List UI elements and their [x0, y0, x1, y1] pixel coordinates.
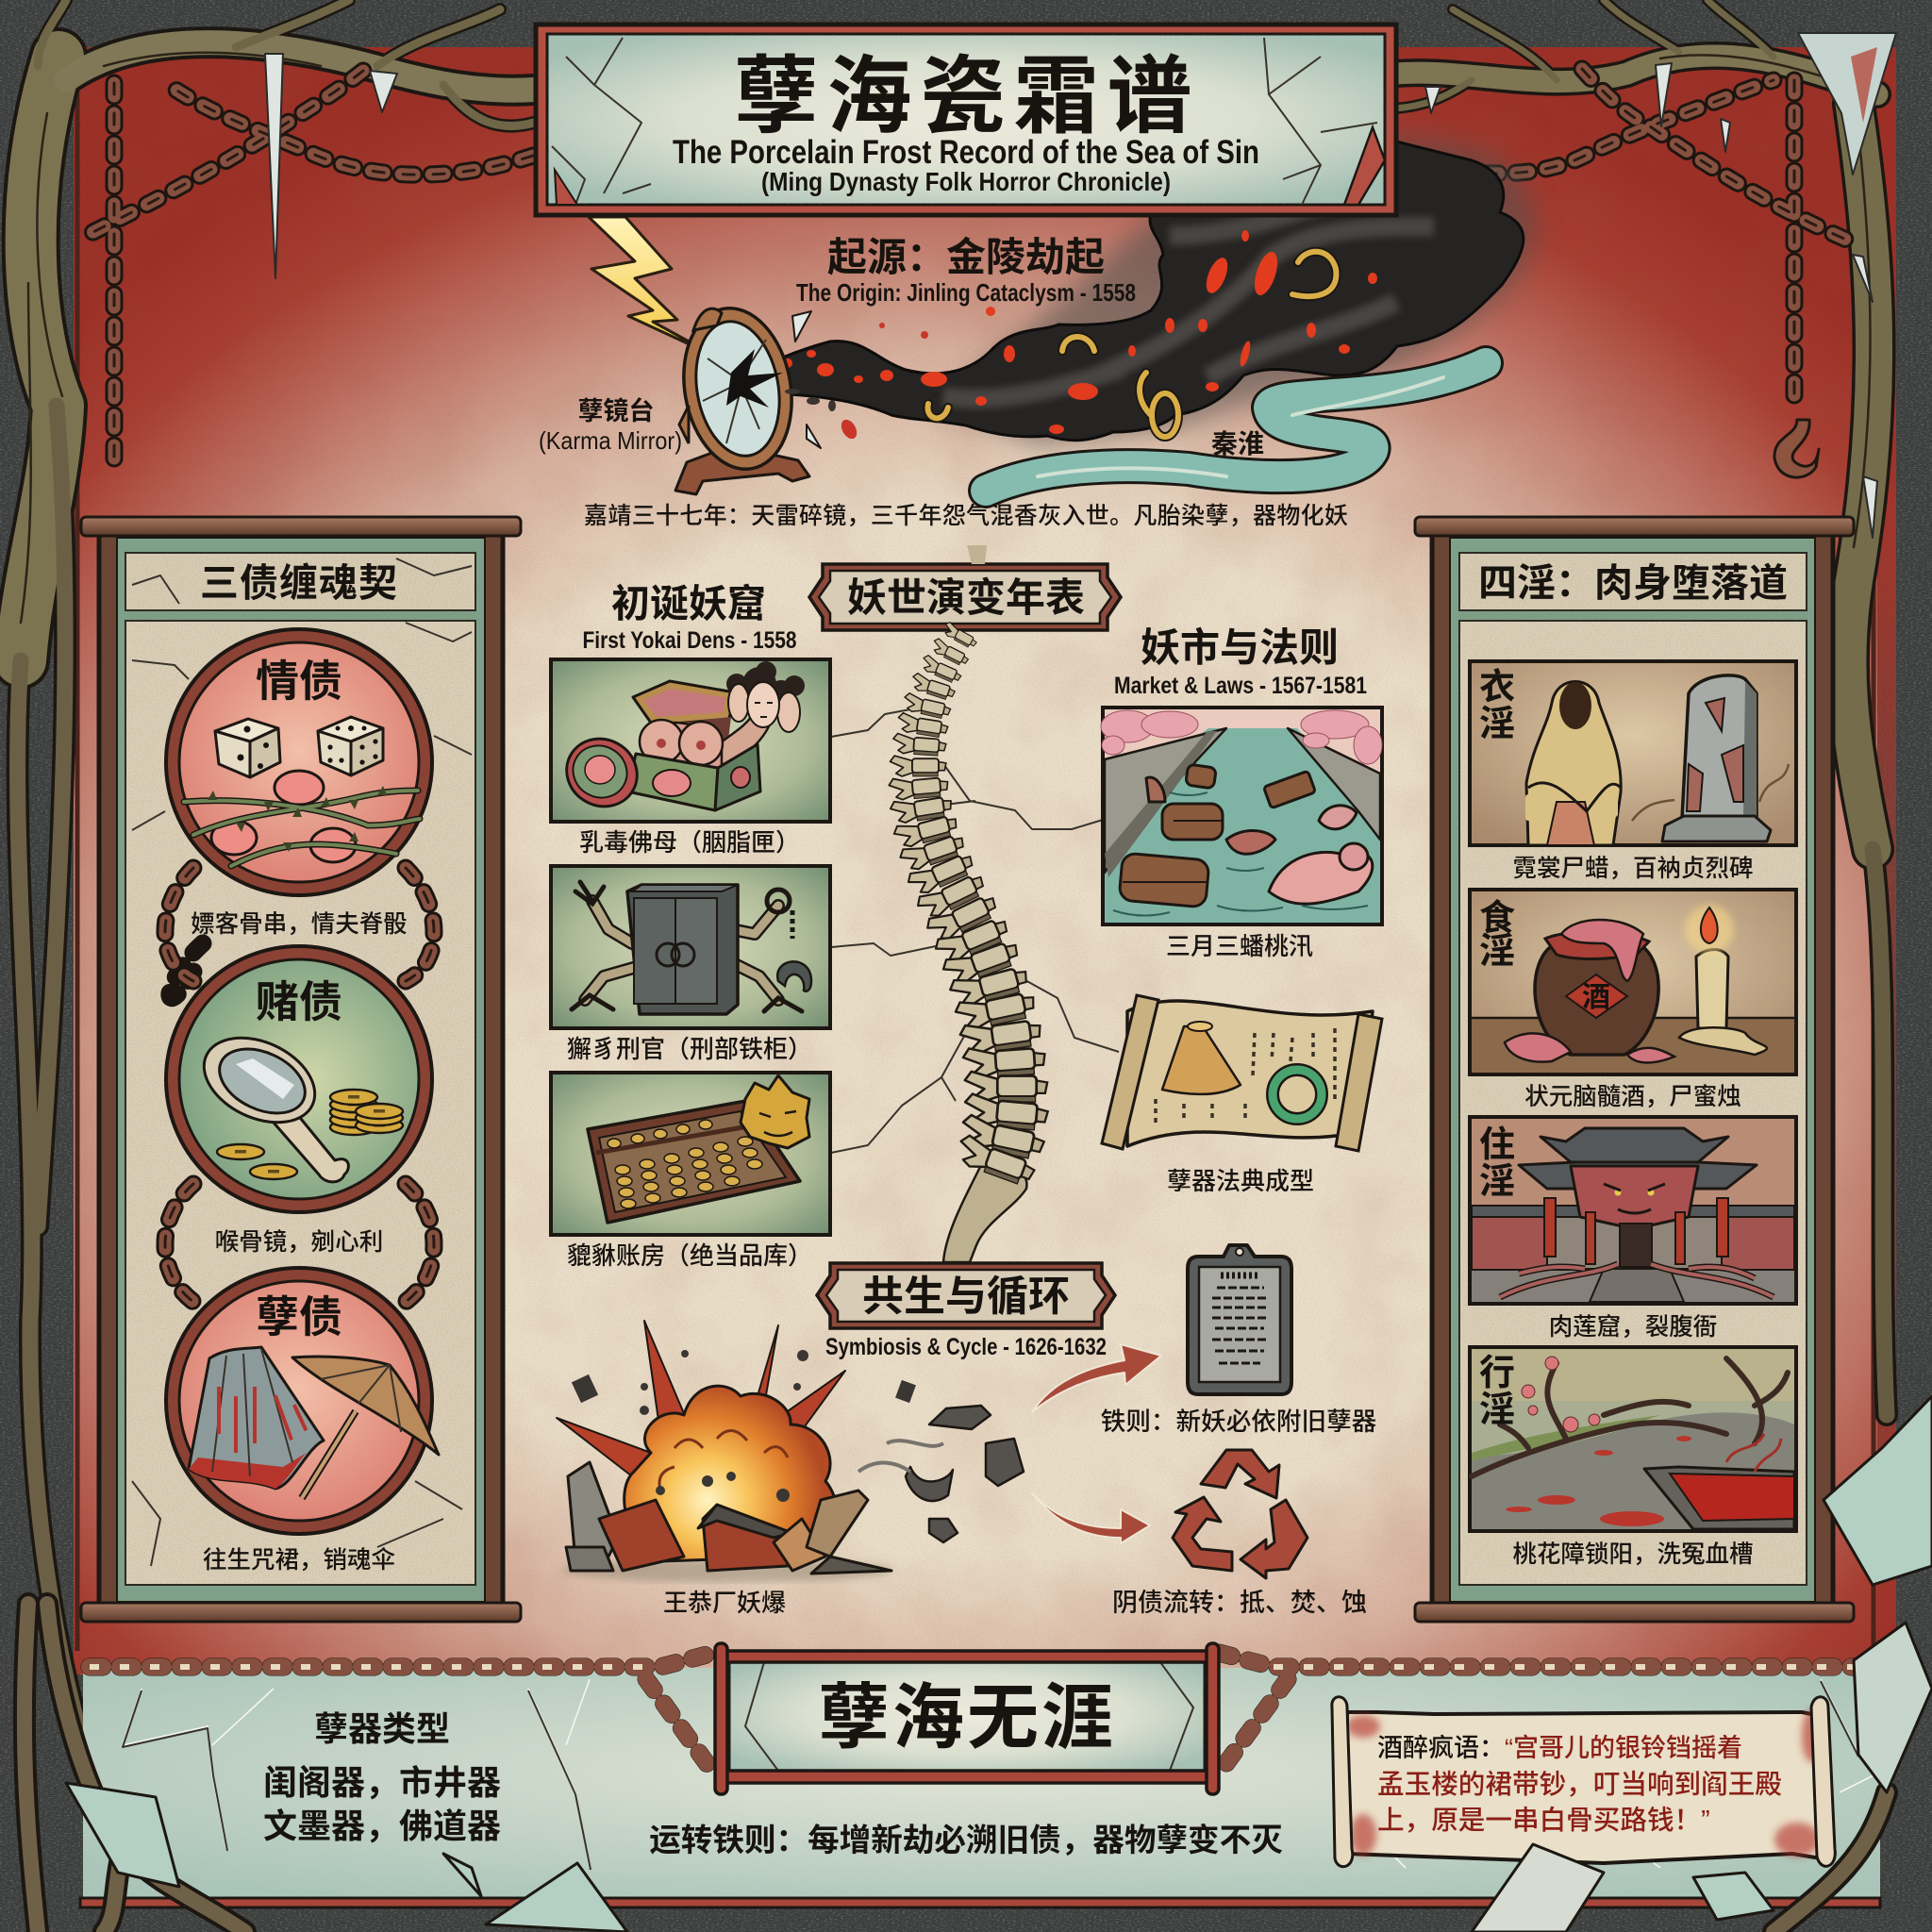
- circle label: 赌债: [256, 977, 342, 1026]
- icon: recycle arrows: [1173, 1450, 1307, 1578]
- bottom left: vessel types: 孽器类型: [314, 1709, 450, 1748]
- origin: Qinhuai river: [986, 363, 1486, 491]
- caption: rouge box: 乳毒佛母（胭脂匣）: [579, 828, 800, 857]
- section: first yokai dens heading: [583, 582, 797, 654]
- illustration: peach flood canal: [1101, 708, 1382, 924]
- vertical label: [1479, 1354, 1515, 1430]
- peaches: [211, 771, 356, 862]
- timeline plaque: [809, 564, 1121, 630]
- origin heading: 起源：金陵劫起: [827, 235, 1105, 279]
- caption: dwelling lust: 肉莲窟，裂腹衙: [1549, 1314, 1717, 1341]
- title text: 孽海瓷霜谱: [734, 50, 1200, 144]
- caption: explosion: 王恭厂妖爆: [663, 1589, 786, 1617]
- section: first yokai dens heading: First Yokai Dens - 1558: [583, 627, 797, 654]
- icon: shattered karma mirror: [672, 300, 928, 494]
- label: Qinhuai: 秦淮: [1211, 429, 1264, 458]
- vignette: food lust: 酒: [1582, 982, 1610, 1013]
- vertical label: 淫: [1479, 1391, 1515, 1430]
- illustration: abacus: [551, 1073, 830, 1235]
- English subtitle: The Porcelain Frost Record of the Sea of Sin: [673, 134, 1259, 171]
- timeline plaque: 妖世演变年表: [847, 575, 1085, 620]
- vertical label: 衣: [1479, 668, 1515, 708]
- centre plaque: endless sea of sin: [715, 1643, 1219, 1794]
- caption: peach flood: 三月三蟠桃汛: [1166, 932, 1313, 960]
- section: market and laws heading: [1114, 625, 1367, 699]
- vertical label: [1479, 668, 1515, 744]
- vertical label: [1479, 1125, 1515, 1202]
- vertical label: 食: [1479, 899, 1515, 939]
- timeline: spine: [889, 621, 1049, 1262]
- symbiosis subheading: Symbiosis & Cycle - 1626-1632: [825, 1334, 1107, 1360]
- vignette: clothing lust: [1470, 661, 1796, 845]
- vertical label: 住: [1479, 1125, 1515, 1165]
- scroll rods: [81, 517, 521, 1622]
- soul umbrella: [302, 1411, 356, 1498]
- callout: drunken raving scroll: 孟玉楼的裙带钞，叮当响到阎王殿: [1377, 1770, 1782, 1800]
- callout: drunken raving scroll: 酒醉疯语：“宫哥儿的银铃铛摇着: [1377, 1734, 1742, 1762]
- callout: drunken raving scroll: 上，原是一串白骨买路钱！”: [1377, 1806, 1710, 1836]
- bottom left: vessel types: 文墨器，佛道器: [263, 1807, 501, 1845]
- illustration: law scroll: [1102, 995, 1382, 1151]
- title panel: [536, 25, 1396, 215]
- coins: [217, 1090, 403, 1179]
- vignette: food lust: [1470, 890, 1796, 1074]
- English note: (Ming Dynasty Folk Horror Chronicle): [761, 167, 1171, 196]
- dice: [215, 717, 383, 777]
- caption: abacus: 貔貅账房（绝当品库）: [567, 1241, 812, 1270]
- ruins: [566, 1462, 891, 1574]
- background: paper grain: [74, 47, 1877, 1674]
- caption: clothing lust: 霓裳尸蜡，百衲贞烈碑: [1512, 856, 1754, 882]
- flying debris: [906, 1406, 1024, 1542]
- arrow: explosion to iron rule: [1032, 1344, 1161, 1412]
- bottom chain: horizontal and supports: [90, 1653, 1877, 1774]
- tree roots: bottom: [25, 1604, 1887, 1932]
- label: karma mirror: (Karma Mirror): [539, 426, 682, 455]
- centre plaque: endless sea of sin: 孽海无涯: [818, 1678, 1116, 1758]
- chains: upper left: [80, 71, 533, 469]
- section: first yokai dens heading: 初诞妖窟: [611, 582, 766, 625]
- section: market and laws heading: Market & Laws - 1567-1581: [1114, 673, 1367, 699]
- illustration: iron cabinet: [551, 866, 830, 1028]
- background: paper blotches: [74, 47, 1877, 1674]
- caption: iron cabinet: 獬豸刑官（刑部铁柜）: [567, 1035, 812, 1063]
- caption: iron rule: 铁则：新妖必依附旧孽器: [1101, 1407, 1376, 1436]
- caption: travel lust: 桃花障锁阳，洗冤血槽: [1512, 1541, 1754, 1568]
- origin subheading: The Origin: Jinling Cataclysm - 1558: [796, 278, 1136, 307]
- vignette: dwelling lust: [1470, 1117, 1796, 1304]
- icicles and ice shards: [265, 33, 1896, 538]
- vignette: travel lust: [1470, 1347, 1796, 1531]
- illustration: rouge box: [551, 659, 830, 822]
- caption: law scroll: 孽器法典成型: [1167, 1167, 1314, 1195]
- origin description: 嘉靖三十七年：天雷碎镜，三千年怨气混香灰入世。凡胎染孽，器物化妖: [584, 503, 1348, 529]
- caption: yin debt flow: 阴债流转：抵、焚、蚀: [1112, 1589, 1367, 1617]
- bottom centre: operating rule: 运转铁则：每增新劫必溯旧债，器物孽变不灭: [649, 1823, 1283, 1858]
- circle label: 孽债: [256, 1292, 342, 1341]
- tree: left trunk and branches: [18, 0, 534, 1840]
- arrow: explosion to cycle: [1032, 1493, 1150, 1543]
- bone mirror: [274, 1108, 348, 1182]
- curse skirt: [189, 1347, 324, 1489]
- label: karma mirror: 孽镜台: [577, 396, 655, 425]
- vertical label: [1479, 899, 1515, 972]
- origin: black smoke plume with embers: [740, 138, 1536, 443]
- bone stub above plaque: [967, 545, 987, 564]
- symbiosis plaque: [817, 1263, 1115, 1328]
- panel: four lusts scroll: [1415, 517, 1854, 1622]
- caption: love debt: 嫖客骨串，情夫脊骰: [191, 911, 408, 938]
- callout: drunken raving scroll: [1332, 1697, 1835, 1867]
- tree: right trunk and branches: [1396, 0, 1887, 1415]
- circle label: 情债: [256, 657, 342, 706]
- circle: love debt: [166, 629, 432, 895]
- bottom left: vessel types: [263, 1709, 501, 1845]
- icon: lightning bolt: [589, 217, 718, 358]
- caption: gambling debt: 喉骨镜，剜心利: [215, 1229, 383, 1256]
- background: blood red vignette: [74, 47, 1896, 1674]
- section: market and laws heading: 妖市与法则: [1141, 625, 1339, 670]
- thorn vines: [184, 791, 420, 866]
- bottom porcelain panel: [80, 1668, 1880, 1907]
- circle: sin debt: [166, 1268, 439, 1534]
- panel heading: 四淫：肉身堕落道: [1478, 561, 1788, 605]
- broken porcelain shards: [66, 1396, 1932, 1932]
- vertical label: 淫: [1479, 1162, 1515, 1202]
- icon: iron tablet: [1188, 1245, 1291, 1394]
- chain links between circles: [165, 868, 434, 1302]
- label: karma mirror: [539, 396, 682, 455]
- bottom left: vessel types: 闺阁器，市井器: [263, 1763, 501, 1802]
- caption: sin debt: 往生咒裙，销魂伞: [203, 1547, 395, 1574]
- vertical label: 淫: [1479, 705, 1515, 744]
- illustration: Wanggongchang explosion: [557, 1321, 1024, 1582]
- background: parchment sheet: [74, 47, 1877, 1674]
- vertical label: 行: [1479, 1354, 1515, 1393]
- symbiosis plaque: 共生与循环: [862, 1274, 1070, 1320]
- cracks linking nodes to spine: [831, 705, 1119, 1153]
- panel: three debts scroll: [81, 517, 521, 1622]
- scroll rods: [1415, 517, 1854, 1622]
- vertical label: 淫: [1479, 932, 1515, 972]
- circle: gambling debt: [166, 946, 432, 1212]
- chains: upper right with hook: [1397, 69, 1859, 477]
- panel heading: 三债缠魂契: [200, 561, 398, 605]
- sheet edge lines: [77, 57, 1874, 1651]
- caption: food lust: 状元脑髓酒，尸蜜烛: [1524, 1084, 1741, 1110]
